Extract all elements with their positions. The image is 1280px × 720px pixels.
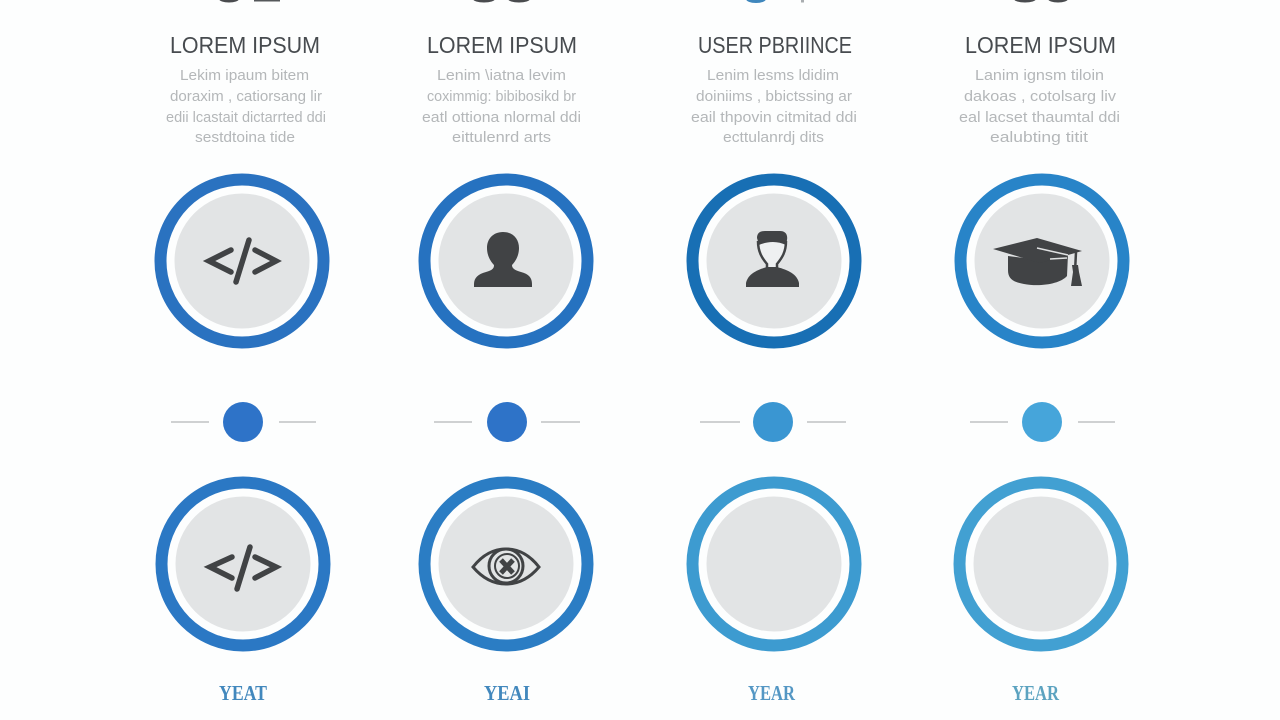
description: column 4: ealubting titit (990, 130, 1088, 146)
heading: column 4: LOREM IPSUM (965, 32, 1116, 58)
description: column 4: Lanim ignsm tiloin (975, 68, 1104, 84)
description: column 2: coximmig: bibibosikd br (427, 89, 576, 105)
description: column 1: edii lcastait dictarrted ddi (166, 110, 326, 126)
top badge 1: code (160, 180, 324, 342)
description: column 1: sestdtoina tide (195, 130, 295, 146)
column 2 text (422, 32, 581, 146)
top badge 3: user with hair (692, 180, 856, 342)
timeline marker 2 (434, 402, 580, 442)
icon: crossed eye (473, 549, 539, 584)
description: column 1 (166, 68, 326, 146)
top badge 2: person (424, 180, 588, 342)
icon: person silhouette (474, 232, 532, 287)
bottom badge 4: empty (960, 482, 1122, 646)
description: column 3: ecttulanrdj dits (723, 130, 824, 146)
icon: graduation cap (993, 238, 1082, 286)
timeline marker 4 (970, 402, 1115, 442)
year label 4: YEAR (1012, 681, 1059, 705)
description: column 4: eal lacset thaumtal ddi (959, 110, 1120, 126)
column 3 text (691, 32, 857, 146)
description: column 2: eatl ottiona nlormal ddi (422, 110, 581, 126)
heading: column 3: USER PBRIINCE (698, 32, 852, 58)
description: column 2: Lenim \iatna levim (437, 68, 566, 84)
bottom badge 3: empty (692, 482, 856, 646)
icon: code brackets (210, 547, 276, 589)
timeline marker 1 (171, 402, 316, 442)
column 1 text (166, 32, 326, 146)
bottom badge 2: eye (424, 482, 588, 646)
description: column 2 (422, 68, 581, 146)
timeline marker 3 (700, 402, 846, 442)
description: column 3: doiniims , bbictssing ar (696, 89, 852, 105)
description: column 3: eail thpovin citmitad ddi (691, 110, 857, 126)
cropped numerals along the top edge (219, 0, 1068, 3)
description: column 2: eittulenrd arts (452, 130, 551, 146)
description: column 1: doraxim , catiorsang lir (170, 89, 322, 105)
year label 1: YEAT (219, 681, 268, 705)
top badge 4: graduation cap (960, 180, 1124, 342)
description: column 3: Lenim lesms ldidim (707, 68, 839, 84)
description: column 4 (959, 68, 1120, 146)
year label 3: YEAR (748, 681, 795, 705)
icon: code brackets (209, 240, 276, 282)
column 4 text (959, 32, 1120, 146)
year label 2: YEAI (484, 681, 530, 705)
heading: column 1: LOREM IPSUM (170, 32, 320, 58)
icon: user outline (746, 231, 799, 287)
heading: column 2: LOREM IPSUM (427, 32, 577, 58)
description: column 4: dakoas , cotolsarg liv (964, 89, 1117, 105)
description: column 3 (691, 68, 857, 146)
description: column 1: Lekim ipaum bitem (180, 68, 309, 84)
bottom badge 1: code (162, 482, 324, 646)
